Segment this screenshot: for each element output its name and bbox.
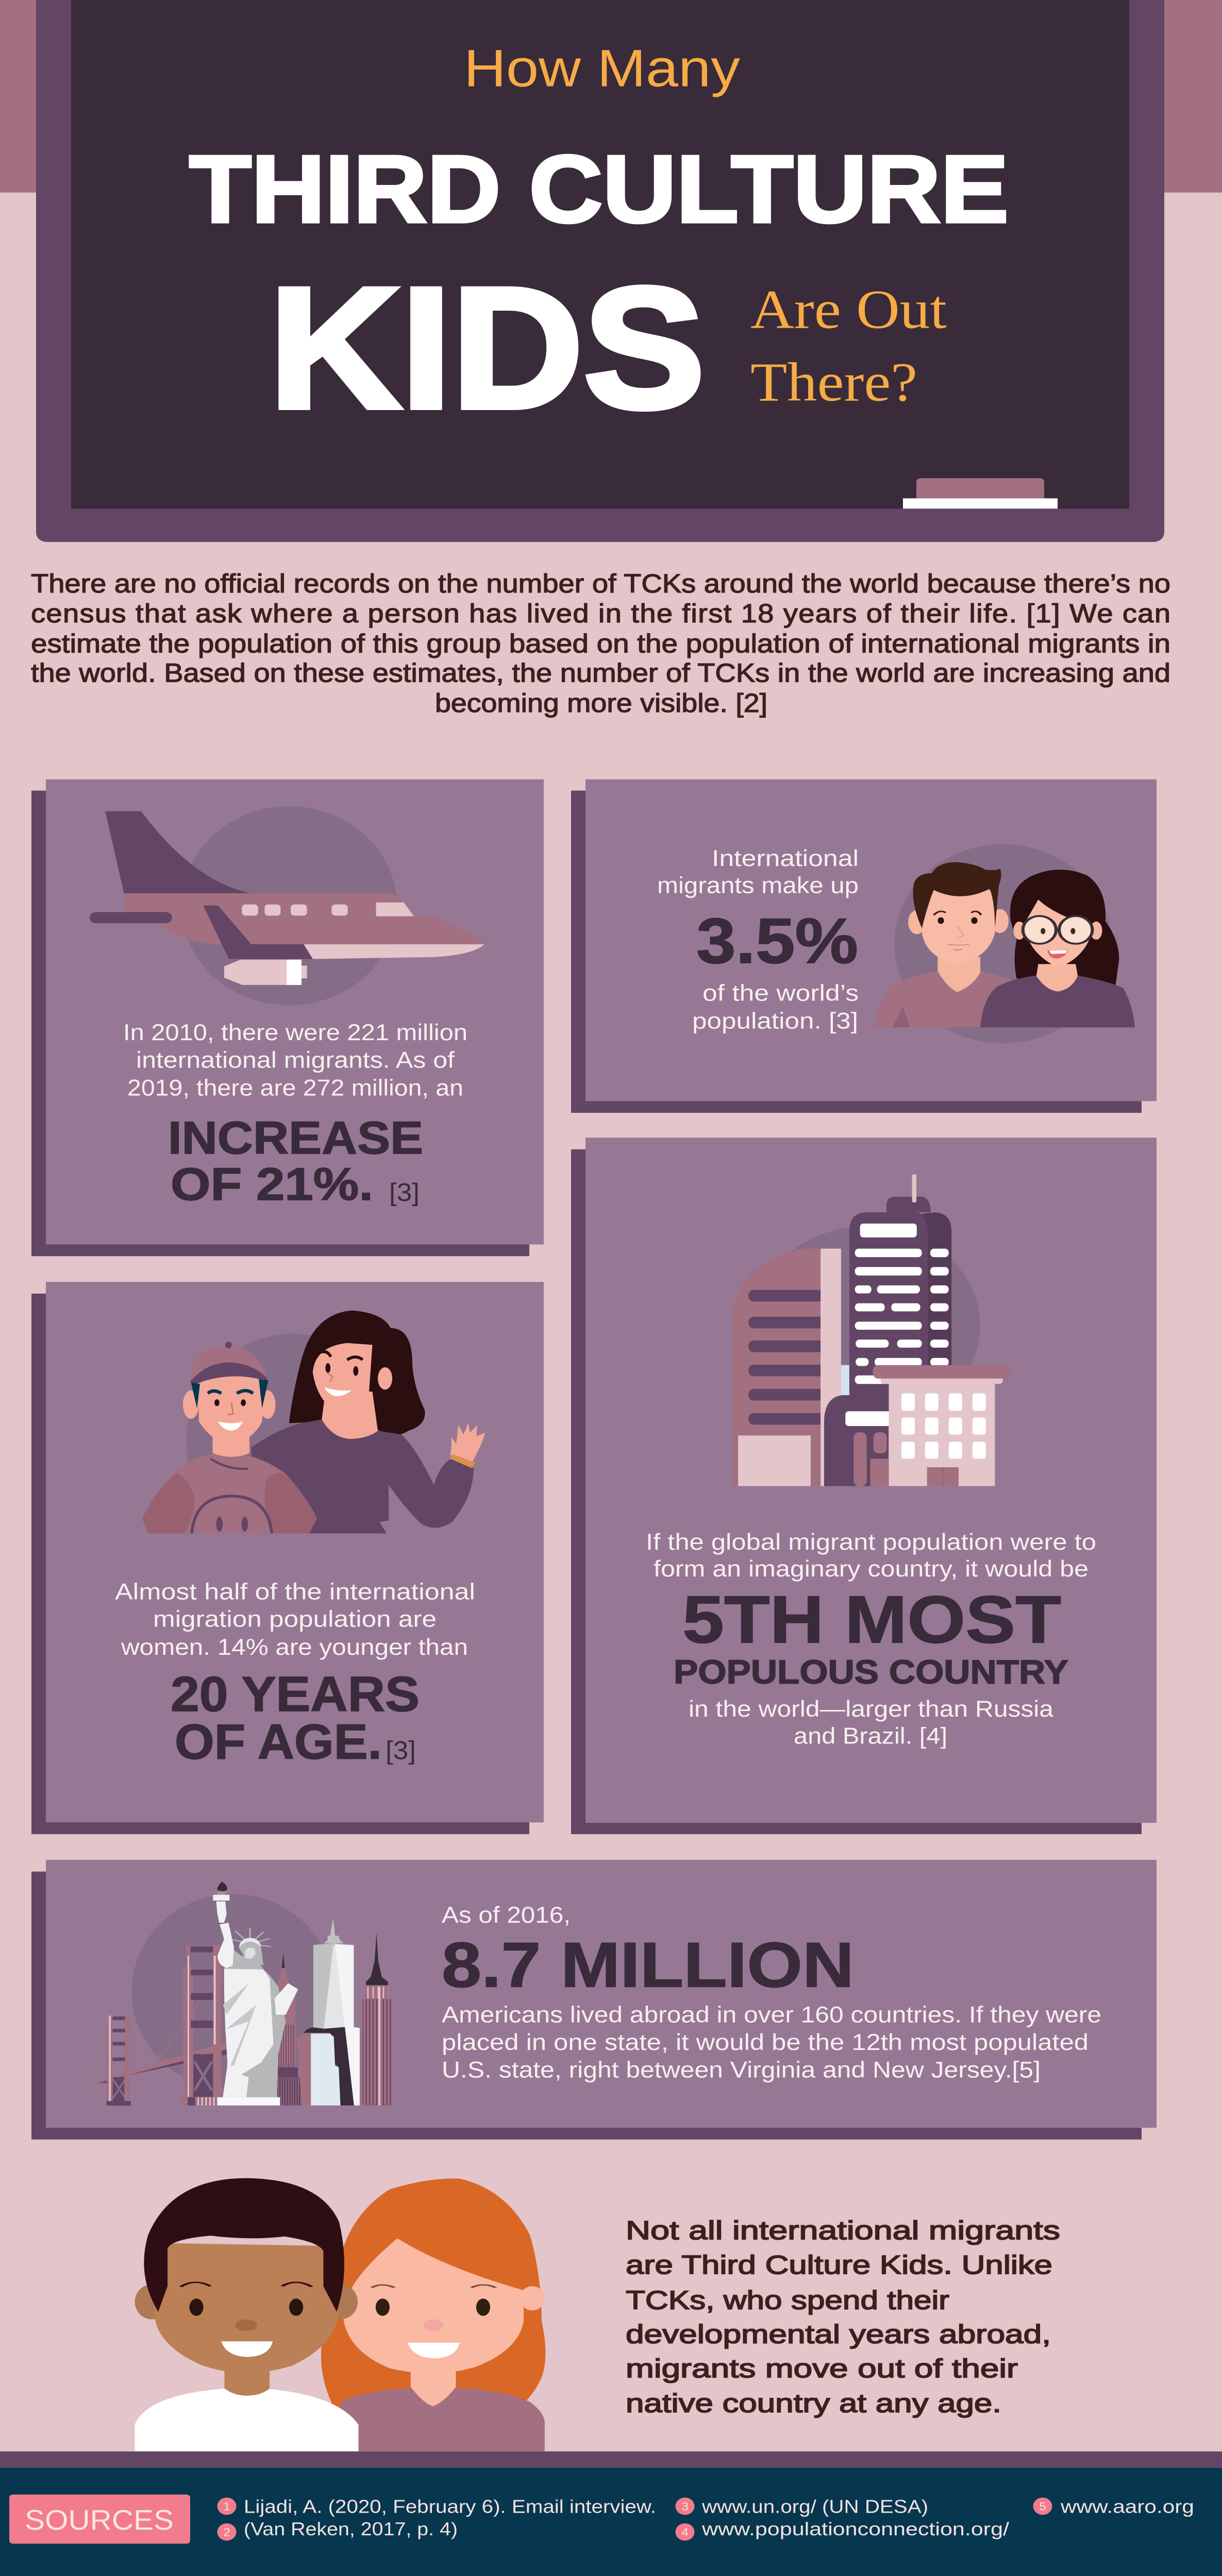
source 4: 4 bbox=[681, 2526, 689, 2538]
text block: POPULOUS COUNTRY bbox=[674, 1654, 1068, 1691]
text block: not all migrants are TCKs: TCKs, who spend their bbox=[626, 2286, 949, 2315]
panel: Americans abroad bbox=[31, 1860, 1157, 2140]
header side band bbox=[0, 0, 1222, 193]
text block: As of 2016, bbox=[442, 1902, 571, 1927]
source 4: www.populationconnection.org/ bbox=[701, 2519, 1009, 2539]
callout: increase of 21%: OF 21%. bbox=[171, 1158, 373, 1210]
text block: in the world—larger than Russia bbox=[689, 1696, 1054, 1721]
illustration: two kids bbox=[135, 2178, 545, 2451]
callout: 20 years of age: [3] bbox=[386, 1736, 416, 1765]
card bbox=[46, 1860, 1157, 2128]
card shadow bbox=[31, 1872, 1142, 2140]
footer band bbox=[0, 2451, 1222, 2468]
text block: international migrants: 3.5% bbox=[696, 905, 858, 977]
sources button bbox=[9, 2495, 190, 2544]
card bbox=[585, 779, 1157, 1101]
source 3: www.un.org/ (UN DESA) bbox=[701, 2496, 928, 2517]
source 2: 2 bbox=[223, 2526, 230, 2538]
text block: 2019, there are 272 million, an bbox=[127, 1075, 463, 1100]
text block bbox=[123, 1020, 467, 1100]
card shadow bbox=[31, 1294, 529, 1834]
intro paragraph: There are no official records on the number of TCKs around the world because there’s no bbox=[31, 569, 1170, 598]
card shadow bbox=[571, 1149, 1142, 1834]
board surface bbox=[71, 0, 1129, 509]
card shadow bbox=[571, 791, 1142, 1113]
text block: 5TH MOST bbox=[682, 1582, 1061, 1657]
icon: eraser bbox=[916, 478, 1044, 498]
text block: international migrants: of the world’s bbox=[702, 980, 859, 1006]
text block bbox=[646, 1529, 1096, 1749]
board frame bbox=[36, 0, 1164, 542]
text block: international migrants: International bbox=[712, 845, 859, 871]
source 3: 3 bbox=[681, 2500, 689, 2513]
sources button: SOURCES bbox=[25, 2504, 174, 2536]
text block: migration population are bbox=[153, 1606, 437, 1632]
title: THIRD CULTURE bbox=[189, 136, 1009, 243]
text block: and Brazil. [4] bbox=[794, 1723, 947, 1749]
text block: Almost half of the international bbox=[115, 1579, 475, 1604]
title bbox=[189, 39, 1009, 444]
text block: international migrants: population. [3] bbox=[692, 1008, 858, 1033]
text block: 8.7 MILLION bbox=[442, 1929, 854, 2001]
text block: If the global migrant population were to bbox=[646, 1529, 1096, 1555]
text block: form an imaginary country, it would be bbox=[654, 1556, 1089, 1582]
callout: increase of 21%: [3] bbox=[389, 1178, 420, 1206]
text block: international migrants. As of bbox=[136, 1047, 455, 1073]
callout: 20 years of age: OF AGE. bbox=[175, 1715, 382, 1770]
text block: Americans lived abroad in over 160 countries. If they were bbox=[442, 2002, 1101, 2027]
callout: increase of 21%: INCREASE bbox=[168, 1112, 423, 1163]
icon: city buildings bbox=[731, 1174, 1011, 1486]
footer background bbox=[0, 2468, 1222, 2576]
icon: woman and boy bbox=[142, 1311, 485, 1533]
card bbox=[585, 1138, 1157, 1823]
callout: 20 years of age bbox=[171, 1667, 420, 1770]
title: KIDS bbox=[269, 251, 705, 444]
intro paragraph bbox=[31, 569, 1170, 718]
callout: increase of 21% bbox=[168, 1112, 423, 1210]
source 1: 1 bbox=[223, 2500, 230, 2513]
icon: American landmarks bbox=[90, 1882, 392, 2106]
text block: international migrants bbox=[657, 845, 859, 1033]
panel: women and youth bbox=[31, 1282, 544, 1834]
text block: not all migrants are TCKs bbox=[626, 2216, 1060, 2418]
panel: sources footer bbox=[0, 2468, 1222, 2576]
text block bbox=[442, 1902, 1101, 2082]
text block: not all migrants are TCKs: Not all international migrants bbox=[626, 2216, 1060, 2245]
intro paragraph: estimate the population of this group based on the population of international migrants in bbox=[31, 630, 1170, 658]
text block: In 2010, there were 221 million bbox=[123, 1020, 467, 1045]
intro paragraph: becoming more visible. [2] bbox=[435, 689, 767, 718]
title: How Many bbox=[464, 39, 741, 97]
icon: couple bbox=[873, 844, 1135, 1043]
title: Are Out bbox=[750, 279, 947, 340]
callout: 20 years of age: 20 YEARS bbox=[171, 1667, 420, 1722]
text block: not all migrants are TCKs: migrants move out of their bbox=[626, 2354, 1018, 2383]
source 5: 5 bbox=[1039, 2500, 1046, 2513]
text block: not all migrants are TCKs: are Third Culture Kids. Unlike bbox=[626, 2251, 1052, 2280]
text block: not all migrants are TCKs: native country at any age. bbox=[626, 2389, 1001, 2418]
text block: placed in one state, it would be the 12th most populated bbox=[442, 2029, 1089, 2055]
source 5: www.aaro.org bbox=[1060, 2496, 1194, 2517]
source 2: (Van Reken, 2017, p. 4) bbox=[244, 2519, 458, 2539]
source 1: Lijadi, A. (2020, February 6). Email interview. bbox=[244, 2496, 656, 2517]
panel: fifth most populous bbox=[571, 1138, 1157, 1834]
title: There? bbox=[750, 352, 917, 413]
text block bbox=[115, 1579, 475, 1659]
intro paragraph: census that ask where a person has lived in the first 18 years of their life. [1] We can bbox=[31, 599, 1170, 629]
card bbox=[46, 1282, 544, 1822]
card bbox=[46, 779, 544, 1244]
text block: international migrants: migrants make up bbox=[657, 873, 859, 898]
panel: chalkboard header bbox=[36, 0, 1164, 542]
text block: U.S. state, right between Virginia and New Jersey.[5] bbox=[442, 2057, 1041, 2082]
panel: share of world population bbox=[571, 779, 1157, 1113]
icon: chalk bbox=[903, 498, 1058, 509]
card shadow bbox=[31, 791, 529, 1256]
icon: airplane bbox=[90, 806, 484, 1005]
intro paragraph: the world. Based on these estimates, the number of TCKs in the world are increasing and bbox=[31, 659, 1170, 688]
panel: migrant increase bbox=[31, 779, 544, 1256]
text block: not all migrants are TCKs: developmental years abroad, bbox=[626, 2320, 1051, 2349]
text block: women. 14% are younger than bbox=[121, 1634, 468, 1659]
